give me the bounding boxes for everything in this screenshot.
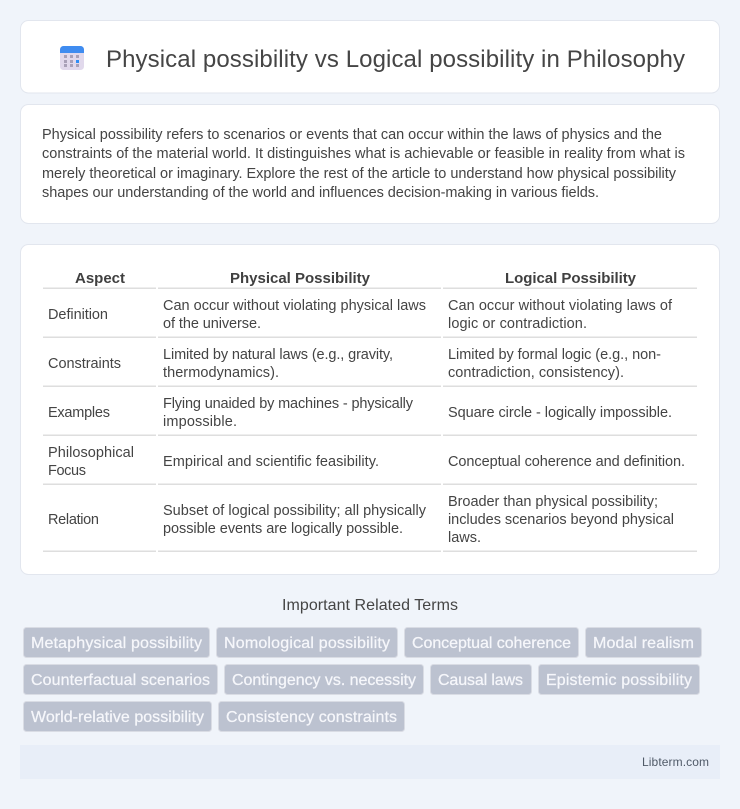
row: constraints: Limited by formal logic (e.g., non-	[448, 347, 661, 363]
intro paragraph: merely theoretical or imaginary. Explore the rest of the article to understand how physical possibility	[42, 166, 677, 182]
tag: contingency vs. necessity	[224, 664, 424, 694]
tag: consistency constraints	[218, 702, 404, 732]
row: definition	[43, 298, 697, 338]
row: philosophical focus: Conceptual coherence and definition.	[448, 454, 685, 470]
row: relation	[43, 494, 697, 552]
tag: epistemic possibility	[538, 664, 700, 694]
tag: conceptual coherence	[404, 628, 578, 658]
table header row: Aspect	[75, 270, 125, 287]
tag: counterfactual scenarios: Counterfactual scenarios	[31, 672, 210, 689]
panel: title header	[20, 20, 720, 93]
footer bar	[20, 745, 720, 779]
row: constraints: contradiction, consistency).	[448, 365, 624, 381]
tag: contingency vs. necessity: Contingency vs. necessity	[232, 672, 416, 689]
row: philosophical focus: Focus	[48, 463, 86, 479]
intro paragraph: constraints of the material world. It distinguishes what is achievable or feasible in reality from what is	[42, 146, 685, 162]
row: examples	[43, 396, 697, 436]
table header row: Logical Possibility	[505, 270, 637, 287]
icon: calendar grid	[60, 46, 84, 70]
row: relation: Relation	[48, 512, 99, 528]
tag: consistency constraints: Consistency constraints	[226, 709, 397, 726]
row: constraints: thermodynamics).	[163, 365, 279, 381]
row: examples: impossible.	[163, 414, 237, 430]
row: definition: Can occur without violating laws of	[448, 298, 673, 314]
intro paragraph	[42, 127, 685, 201]
table header row: Physical Possibility	[230, 270, 371, 287]
row: constraints	[43, 347, 697, 387]
row: relation: Broader than physical possibility;	[448, 494, 658, 510]
panel: comparison table	[20, 244, 720, 574]
intro paragraph: shapes our understanding of the world and influences decision-making in various fields.	[42, 185, 599, 201]
tag: world-relative possibility: World-relative possibility	[31, 709, 204, 726]
row: examples: Square circle - logically impossible.	[448, 405, 672, 421]
row: definition: of the universe.	[163, 316, 261, 332]
row: examples: Flying unaided by machines - physically	[163, 396, 414, 412]
row: constraints: Constraints	[48, 356, 121, 372]
row: constraints: Limited by natural laws (e.g., gravity,	[163, 347, 393, 363]
row: definition: Can occur without violating physical laws	[163, 298, 426, 314]
tag: nomological possibility	[216, 628, 398, 658]
tag: modal realism	[586, 628, 702, 658]
tag: counterfactual scenarios	[24, 664, 218, 694]
row: examples: Examples	[48, 405, 110, 421]
tag: conceptual coherence: Conceptual coherence	[412, 635, 571, 652]
footer source label: Libterm.com	[642, 755, 709, 769]
row: relation: laws.	[448, 530, 481, 546]
row: philosophical focus: Philosophical	[48, 445, 134, 461]
title: Physical possibility vs Logical possibility in Philosophy	[106, 46, 685, 73]
row: relation: Subset of logical possibility; all physically	[163, 503, 427, 519]
tag: metaphysical possibility: Metaphysical possibility	[31, 635, 202, 652]
tag: world-relative possibility	[24, 702, 212, 732]
row: philosophical focus	[43, 445, 697, 485]
tag: causal laws	[430, 664, 532, 694]
row: relation: includes scenarios beyond physical	[448, 512, 674, 528]
row: definition: Definition	[48, 307, 108, 323]
row: definition: logic or contradiction.	[448, 316, 587, 332]
tag: modal realism: Modal realism	[593, 635, 694, 652]
intro paragraph: Physical possibility refers to scenarios or events that can occur within the laws of physics and the	[42, 127, 662, 143]
row: relation: possible events are logically possible.	[163, 521, 403, 537]
tag: nomological possibility: Nomological possibility	[224, 635, 390, 652]
tag: causal laws: Causal laws	[438, 672, 523, 689]
tag: epistemic possibility: Epistemic possibility	[546, 672, 692, 689]
row: philosophical focus: Empirical and scientific feasibility.	[163, 454, 379, 470]
table header row	[43, 270, 697, 289]
tag: metaphysical possibility	[24, 628, 210, 658]
panel: introduction	[20, 104, 720, 224]
related term tags	[24, 628, 702, 732]
heading: important related terms: Important Related Terms	[282, 597, 458, 614]
